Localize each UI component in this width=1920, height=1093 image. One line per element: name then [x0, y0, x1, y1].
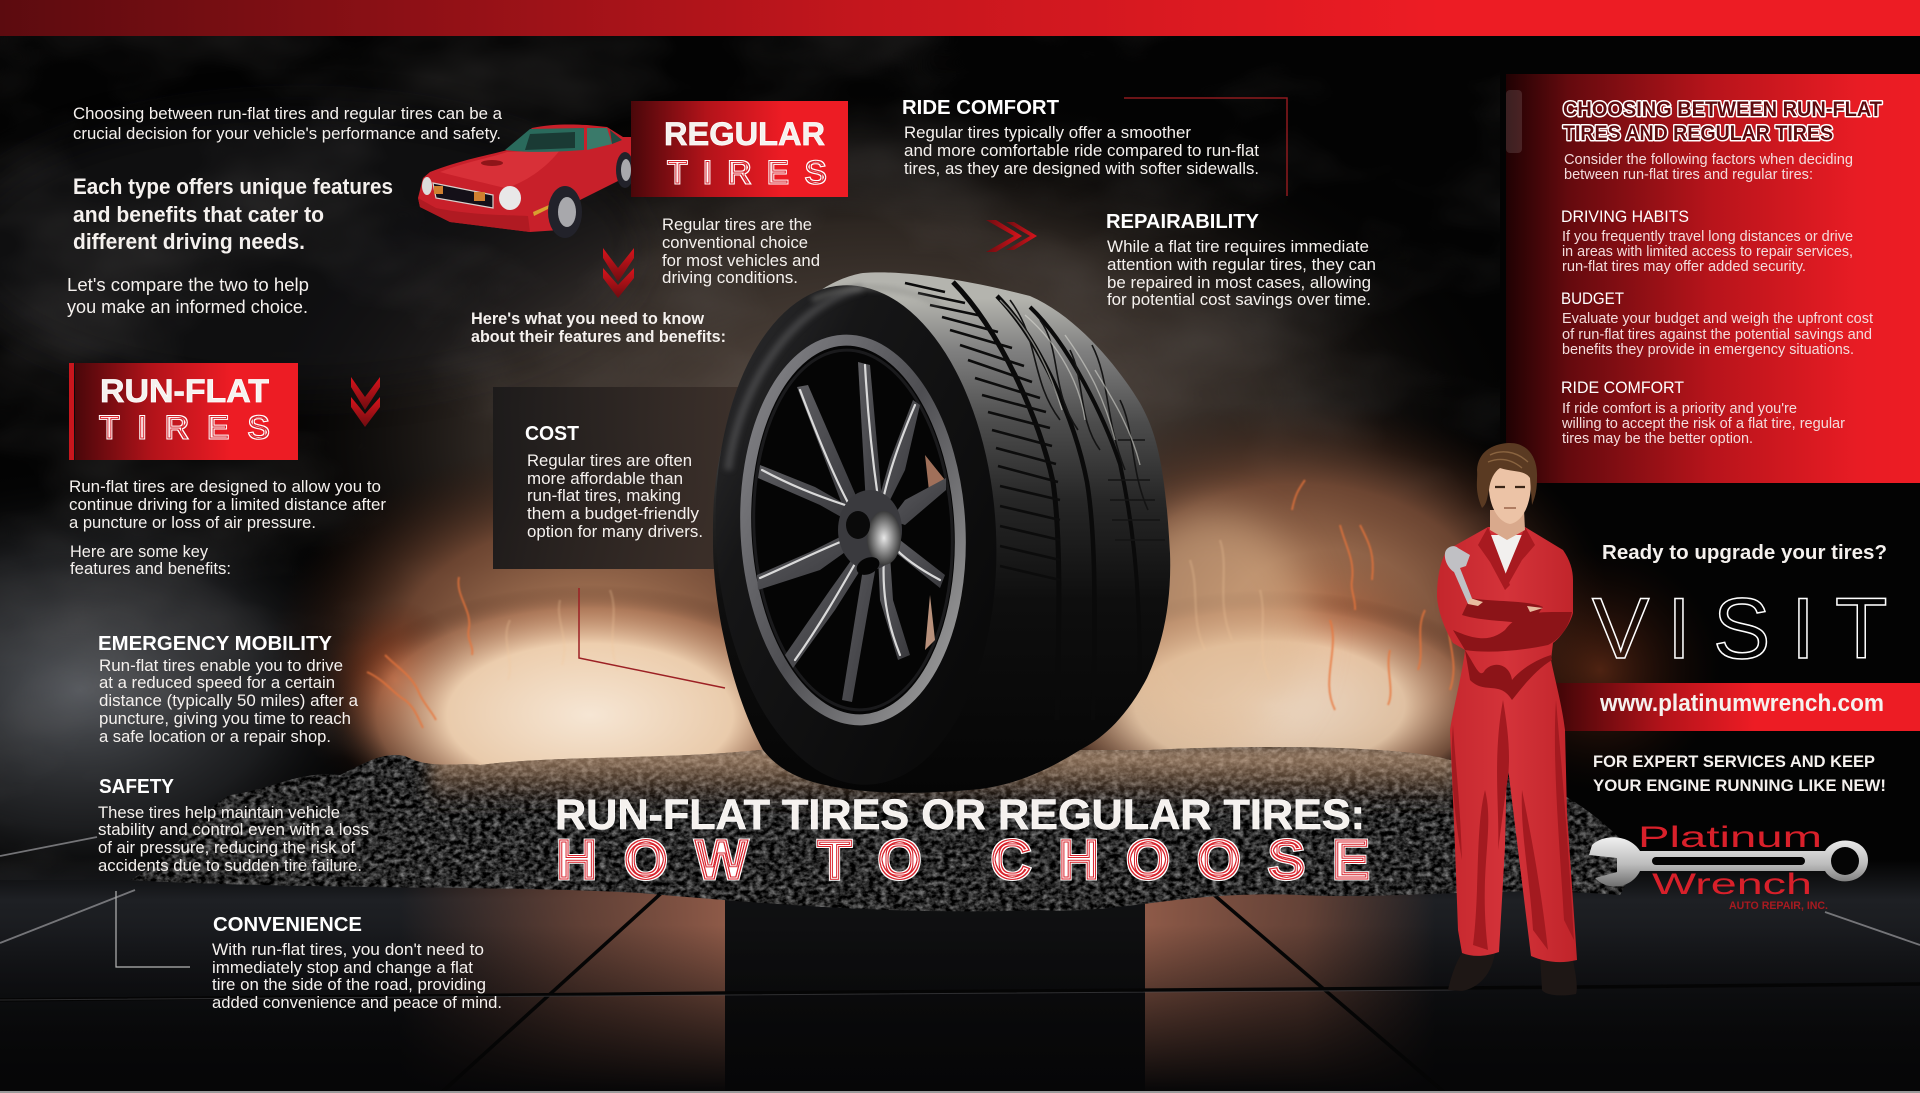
ride comfort block	[902, 97, 1287, 196]
regular tires intro: Regular tires are the	[662, 216, 812, 234]
logo: platinum wrench: Wrench	[1652, 868, 1812, 901]
repairability block	[1106, 211, 1376, 309]
factor: driving habits: run-flat tires may offer added security.	[1562, 259, 1806, 275]
hair	[1477, 443, 1537, 508]
expert services text	[1593, 752, 1886, 795]
run-flat intro	[69, 478, 387, 578]
repairability block: While a flat tire requires immediate	[1107, 238, 1369, 256]
icon: red car	[418, 124, 637, 238]
panel: choosing factors: TIRES AND REGULAR TIRES	[1563, 122, 1833, 145]
url bar	[1553, 683, 1920, 731]
factor: ride comfort: If ride comfort is a priority and you're	[1562, 401, 1797, 417]
factor: budget: Evaluate your budget and weigh the upfront cost	[1562, 311, 1873, 327]
ride comfort block: Regular tires typically offer a smoother	[904, 124, 1192, 142]
logo: platinum wrench	[1589, 821, 1868, 912]
logo: platinum wrench: AUTO REPAIR, INC.	[1729, 900, 1828, 912]
mechanic character	[1437, 443, 1577, 995]
factor: driving habits	[1561, 207, 1853, 275]
icon: wrench in hand	[1445, 546, 1473, 604]
run-flat tires badge: RUN-FLAT	[100, 373, 269, 409]
panel: choosing factors	[1506, 74, 1920, 483]
panel: cost: option for many drivers.	[527, 523, 703, 541]
spokes	[757, 362, 946, 702]
regular tires badge: REGULAR	[664, 116, 825, 152]
shoes	[1448, 950, 1495, 991]
suit shading	[1453, 598, 1572, 700]
panel: cost: them a budget-friendly	[527, 505, 700, 523]
emergency mobility block: EMERGENCY MOBILITY	[98, 633, 333, 655]
rock band	[131, 747, 1626, 912]
regular tires intro: Here's what you need to know	[471, 310, 704, 328]
wheel rim	[736, 335, 970, 725]
intro text: different driving needs.	[73, 229, 305, 254]
logo: platinum wrench: Platinum	[1638, 821, 1822, 854]
connector: convenience bracket	[116, 891, 190, 967]
run-flat intro: continue driving for a limited distance after	[69, 496, 387, 514]
tire	[703, 272, 1170, 793]
emergency mobility block: at a reduced speed for a certain	[99, 674, 335, 692]
icon: chevrons right	[986, 220, 1037, 252]
factor: ride comfort: RIDE COMFORT	[1561, 378, 1684, 397]
repairability block: REPAIRABILITY	[1106, 211, 1260, 233]
safety block: SAFETY	[99, 776, 175, 798]
run-flat tires badge: TIRES	[99, 409, 270, 447]
convenience block: immediately stop and change a flat	[212, 959, 473, 977]
emergency mobility block	[98, 633, 359, 746]
factor: ride comfort	[1561, 378, 1845, 447]
intro text: you make an informed choice.	[67, 297, 308, 317]
intro text	[67, 105, 503, 317]
emergency mobility block: distance (typically 50 miles) after a	[99, 692, 359, 710]
factor: budget: BUDGET	[1561, 289, 1624, 308]
panel: choosing factors: Consider the following factors when deciding	[1564, 152, 1853, 168]
regular tires intro	[471, 216, 820, 346]
panel: cost: run-flat tires, making	[527, 487, 681, 505]
repairability block: for potential cost savings over time.	[1107, 291, 1371, 309]
intro text: Each type offers unique features	[73, 174, 393, 199]
convenience block	[212, 914, 502, 1012]
convenience block: CONVENIENCE	[213, 914, 362, 936]
emergency mobility block: a safe location or a repair shop.	[99, 728, 331, 746]
factor: budget: of run-flat tires against the potential savings and	[1562, 327, 1872, 343]
regular tires badge	[631, 101, 848, 197]
regular tires intro: driving conditions.	[662, 269, 798, 287]
tread pattern	[904, 280, 1165, 585]
panel: cost: Regular tires are often	[527, 452, 692, 470]
convenience block: With run-flat tires, you don't need to	[212, 941, 484, 959]
safety block: stability and control even with a loss	[98, 821, 369, 839]
expert services text: FOR EXPERT SERVICES AND KEEP	[1593, 752, 1875, 771]
intro text: and benefits that cater to	[73, 202, 324, 227]
sidewall	[703, 278, 1009, 792]
safety block: These tires help maintain vehicle	[98, 804, 340, 822]
repairability block: attention with regular tires, they can	[1107, 256, 1376, 274]
convenience block: tire on the side of the road, providing	[212, 976, 486, 994]
visit outline word: VISIT	[1592, 581, 1888, 677]
run-flat intro: features and benefits:	[70, 560, 231, 578]
run-flat intro: a puncture or loss of air pressure.	[69, 514, 316, 532]
hub	[838, 490, 902, 570]
title	[555, 791, 1370, 892]
title: HOW TO CHOOSE	[556, 828, 1370, 892]
suit	[1437, 527, 1577, 962]
top red bar	[0, 0, 1920, 36]
icon: wrench	[1589, 837, 1868, 886]
call to action heading: Ready to upgrade your tires?	[1602, 542, 1887, 564]
ride comfort block: RIDE COMFORT	[902, 97, 1059, 119]
expert services text: YOUR ENGINE RUNNING LIKE NEW!	[1593, 776, 1886, 795]
regular tires intro: for most vehicles and	[662, 252, 820, 270]
flames	[367, 480, 1454, 728]
safety block: of air pressure, reducing the risk of	[98, 839, 355, 857]
factor: budget: benefits they provide in emergency situations.	[1562, 342, 1854, 358]
convenience block: added convenience and peace of mind.	[212, 994, 502, 1012]
regular tires intro: about their features and benefits:	[471, 328, 726, 346]
neck and face	[1490, 510, 1525, 540]
factor: budget	[1561, 289, 1873, 358]
icon: chevrons down regular	[603, 248, 634, 298]
emergency mobility block: puncture, giving you time to reach	[99, 710, 351, 728]
ride comfort block: tires, as they are designed with softer sidewalls.	[904, 160, 1259, 178]
factor: driving habits: DRIVING HABITS	[1561, 207, 1689, 226]
panel: cost: more affordable than	[527, 470, 683, 488]
panel: cost: COST	[525, 423, 579, 445]
intro text: Choosing between run-flat tires and regular tires can be a	[73, 105, 503, 123]
panel: cost	[493, 387, 746, 569]
repairability block: be repaired in most cases, allowing	[1107, 274, 1371, 292]
regular tires intro: conventional choice	[662, 234, 808, 252]
run-flat intro: Run-flat tires are designed to allow you to	[69, 478, 381, 496]
safety block	[98, 776, 369, 875]
emergency mobility block: Run-flat tires enable you to drive	[99, 657, 343, 675]
floor	[0, 860, 1920, 1093]
factor: driving habits: in areas with limited access to repair services,	[1562, 244, 1853, 260]
icon: chevrons down run-flat	[351, 377, 380, 427]
title: RUN-FLAT TIRES OR REGULAR TIRES:	[555, 791, 1365, 839]
panel: choosing factors: between run-flat tires and regular tires:	[1564, 167, 1813, 183]
safety block: accidents due to sudden tire failure.	[98, 857, 362, 875]
factor: driving habits: If you frequently travel long distances or drive	[1562, 229, 1853, 245]
url bar: www.platinumwrench.com	[1599, 690, 1884, 717]
factor: ride comfort: tires may be the better option.	[1562, 431, 1753, 447]
run-flat tires badge	[69, 363, 298, 460]
regular tires badge: TIRES	[667, 154, 827, 192]
intro text: crucial decision for your vehicle's performance and safety.	[73, 125, 501, 143]
factor: ride comfort: willing to accept the risk of a flat tire, regular	[1561, 416, 1845, 432]
panel: choosing factors: CHOOSING BETWEEN RUN-FLAT	[1563, 98, 1882, 121]
run-flat intro: Here are some key	[70, 543, 209, 561]
bottom edge line	[0, 1091, 1920, 1093]
connector: cost to tire	[579, 588, 725, 688]
ride comfort block: and more comfortable ride compared to run-flat	[904, 142, 1259, 160]
intro text: Let's compare the two to help	[67, 275, 309, 295]
